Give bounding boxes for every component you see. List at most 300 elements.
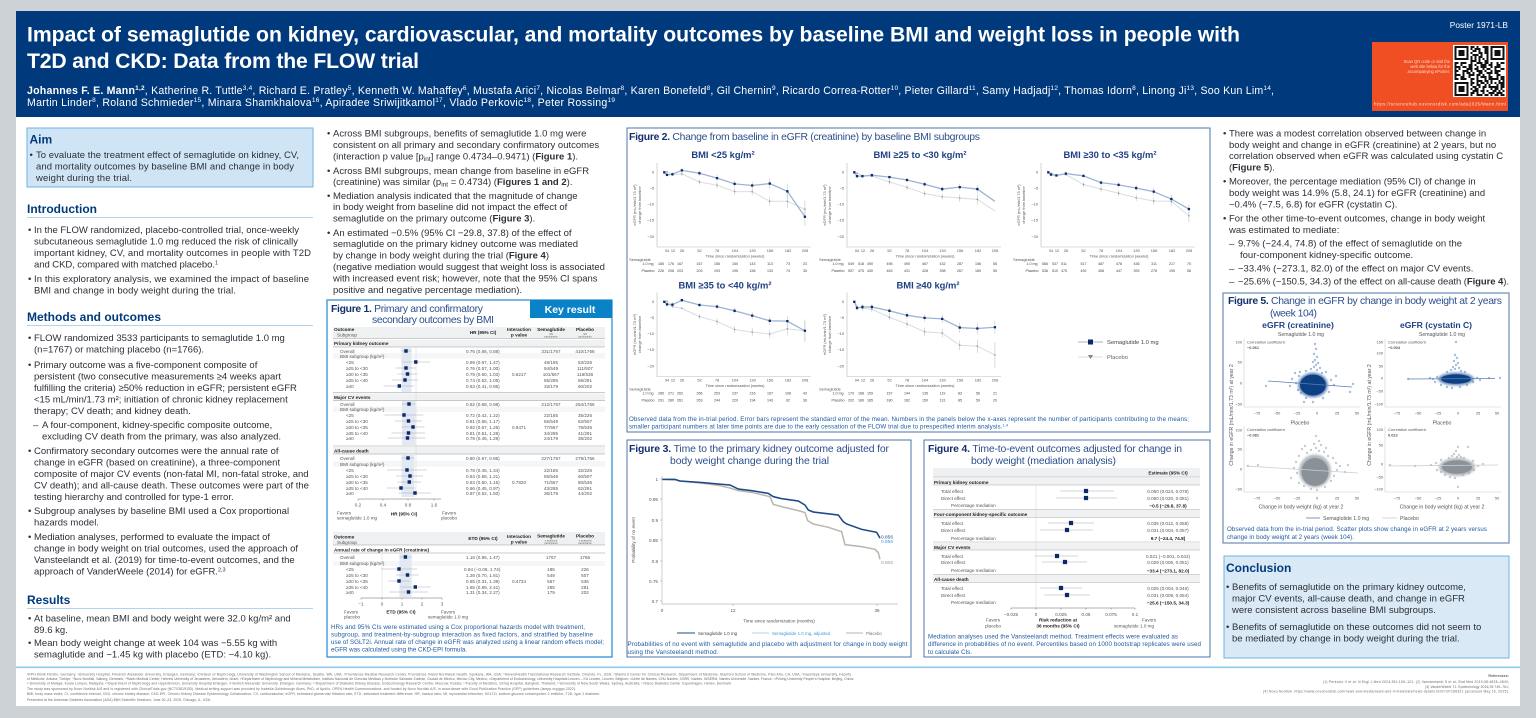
ETD table text: n analyzed bbox=[545, 540, 557, 542]
figure 1 footnote: HRs and 95% CIs were estimated using a Cox proportional hazards model with treatment, bbox=[331, 624, 585, 631]
mediation axis: Favors bbox=[986, 618, 1001, 622]
chart: BMI 25 to 30: 04 bbox=[855, 248, 860, 253]
figure 5 legend bbox=[1306, 516, 1419, 522]
chart: BMI 25 to 30: −5 bbox=[840, 186, 844, 190]
line chart: probability of no event: 1 bbox=[655, 477, 658, 482]
methods text: (n=1767) or matching placebo (n=1766). bbox=[34, 344, 204, 356]
authors: 19 bbox=[608, 97, 615, 104]
chart: BMI 35 to 40: 12 bbox=[671, 378, 675, 382]
chart: BMI under 25: 167 bbox=[677, 262, 683, 266]
chart: BMI 30 to 35: 78 bbox=[1099, 248, 1103, 253]
chart: BMI 25 to 30: 549 bbox=[848, 262, 854, 266]
chart: BMI 30 to 35: 511 bbox=[1061, 262, 1067, 266]
chart: BMI 40 or more: 135 bbox=[922, 392, 928, 396]
chart: BMI 40 or more: 189 bbox=[858, 398, 864, 402]
chart: BMI 35 to 40: 104 bbox=[732, 378, 739, 382]
chart: BMI 35 to 40: −15 bbox=[647, 347, 654, 352]
all-cause death rows: 80/536 bbox=[578, 480, 592, 485]
mediation table text: Four-component kidney-specific outcome bbox=[934, 512, 1028, 517]
chart: BMI 25 to 30: 104 bbox=[922, 248, 929, 253]
authors: 1,2 bbox=[135, 85, 145, 92]
chart: BMI 30 to 35: 458 bbox=[1098, 269, 1104, 273]
mediation table text: All-cause death bbox=[934, 577, 969, 582]
all-cause death rows: ≥35 to <40 bbox=[346, 486, 368, 491]
chart: BMI 30 to 35: 436 bbox=[1134, 262, 1140, 266]
chart: BMI 35 to 40: 261 bbox=[677, 398, 683, 402]
scatter axis titles: Change in body weight (kg) at year 2 bbox=[1259, 504, 1344, 510]
scatter plot: creatinine semaglutide: −0.061 bbox=[1247, 345, 1260, 350]
ETD table text: 1.16 (0.86, 1.47) bbox=[466, 555, 500, 560]
mediation table text: 0.050 (0.024, 0.078) bbox=[1147, 489, 1189, 494]
scatter plot: creatinine placebo: −50 bbox=[1235, 486, 1243, 492]
primary kidney outcome rows: 0.79 (0.60, 1.03) bbox=[466, 372, 500, 377]
chart: BMI 30 to 35: 487 bbox=[1098, 262, 1104, 266]
methods text: hazards model. bbox=[34, 518, 99, 528]
chart: BMI 40 or more: 04 bbox=[855, 378, 860, 382]
line chart: probability of no event: 12 bbox=[730, 608, 736, 613]
chart: BMI 35 to 40: 271 bbox=[668, 392, 674, 396]
methods text: • bbox=[28, 333, 31, 344]
figure 5 footnote: Observed data from the in-trial period. Scatter plots show change in eGFR at 2 years versus bbox=[1227, 526, 1487, 533]
primary kidney outcome rows: 68/291 bbox=[578, 378, 592, 383]
line chart: probability of no event: 0.7 bbox=[652, 599, 658, 604]
authors: , Soo Kun Lim bbox=[1194, 85, 1263, 97]
chart: BMI 30 to 35: 447 bbox=[1116, 269, 1122, 273]
methods text: – bbox=[33, 420, 39, 431]
column 3 findings text: – bbox=[1229, 276, 1235, 288]
references: References: bbox=[1488, 674, 1509, 678]
ETD table text: ≥30 to <35 bbox=[346, 579, 368, 584]
authors: , Apiradee Sriwijitkamol bbox=[320, 97, 435, 109]
scatter plot: cystatin placebo: 25 bbox=[1476, 496, 1480, 500]
chart: BMI 35 to 40: 266 bbox=[696, 392, 702, 396]
column 2 key findings text: Figure 1). bbox=[535, 152, 578, 162]
scatter plot: cystatin semaglutide: −100 bbox=[1374, 402, 1384, 406]
chart: BMI 25 to 30: −10 bbox=[837, 202, 845, 206]
chart: BMI 30 to 35: 517 bbox=[1080, 262, 1086, 266]
chart: BMI 40 or more: −20 bbox=[837, 364, 845, 368]
chart: BMI 25 to 30: Placebo bbox=[832, 269, 844, 273]
authors: , bbox=[1271, 85, 1274, 97]
column 3 findings text: For the other time-to-event outcomes, change in body weight bbox=[1229, 214, 1485, 224]
ETD table text: participants bbox=[544, 541, 558, 545]
all-cause death rows: 55/549 bbox=[544, 474, 558, 479]
mediation table text: −25.6 (−150.5, 34.3) bbox=[1147, 600, 1190, 606]
ETD table text: 179 bbox=[547, 590, 555, 595]
scatter plot: cystatin placebo: −50 bbox=[1415, 496, 1422, 500]
authors: , Karen Bonefeld bbox=[624, 85, 707, 97]
column 2 key findings text: • bbox=[327, 128, 330, 140]
all-cause death rows: BMI subgroup (kg/m²) bbox=[340, 462, 385, 467]
introduction text bbox=[28, 225, 311, 296]
chart: BMI 25 to 30: 26 bbox=[870, 248, 874, 253]
column 3 findings text: 9.7% (−24.4, 74.8) of the effect of semaglutide on the bbox=[1238, 238, 1462, 250]
methods text: change in eGFR (based on creatinine), a three-component bbox=[34, 458, 280, 468]
methods text: composite of major CV events (non-fatal MI, non-fatal stroke, and bbox=[34, 469, 309, 480]
ETD table text: BMI subgroup (kg/m²) bbox=[340, 561, 385, 566]
chart: BMI 25 to 30: 55 bbox=[993, 262, 997, 266]
scatter plot: creatinine placebo: Correlation coefficient: bbox=[1247, 427, 1286, 432]
scatter plot: cystatin semaglutide: 150 bbox=[1376, 340, 1384, 344]
forest plot: HR outcomes bbox=[333, 327, 605, 520]
chart: BMI 35 to 40: 244 bbox=[714, 398, 720, 402]
ETD table text: 0.4734 bbox=[512, 579, 526, 584]
introduction text: • bbox=[28, 274, 31, 285]
line chart: probability of no event: Probability of no event bbox=[631, 517, 636, 563]
primary kidney outcome rows: 0.76 (0.57, 1.00) bbox=[466, 366, 500, 371]
figure 1 footnote: eGFR was calculated using the CKD-EPI formula. bbox=[331, 646, 467, 654]
chart: BMI 35 to 40 bbox=[629, 280, 811, 402]
chart: BMI 35 to 40: 26 bbox=[680, 378, 684, 382]
scatter axis titles: Change in body weight (kg) at year 2 bbox=[1400, 504, 1485, 510]
footer affiliations and disclosures: ¹⁴University of Malaya, Kuala Lumpur, Malaysia; ¹⁵Department of Nephrology and Hypertension, University Hospital Erlangen, Friedrich Alexander University, Erlangen, Germany; ¹⁶Department of Diabetes Kidney Disease, Endocrinology Research Centre, Moscow, Russia; ¹⁷Faculty of Medicine, Siriraj Hospital, Bangkok, Thailand; ¹⁸University of New South Wales, Sydney, Australia; ¹⁹Steno Diabetes Center Copenhagen, Herlev, Denmark bbox=[27, 682, 731, 686]
conclusion text: were consistent across baseline BMI subgroups. bbox=[1231, 605, 1436, 616]
scatter plot: creatinine semaglutide bbox=[1235, 339, 1360, 416]
column 3 findings text: was estimated to mediate: bbox=[1228, 225, 1339, 236]
key result tab bbox=[530, 300, 612, 318]
chart: BMI 40 or more: 159 bbox=[867, 392, 873, 396]
ETD table text: ETD (95% CI) bbox=[468, 536, 498, 541]
major CV events rows: 0.79 (0.46, 1.29) bbox=[466, 436, 500, 441]
primary kidney outcome rows: BMI subgroup (kg/m²) bbox=[340, 354, 385, 359]
scatter plot: creatinine semaglutide: 25 bbox=[1335, 410, 1339, 416]
introduction text: In the FLOW randomized, placebo-controlled trial, once-weekly bbox=[34, 225, 299, 236]
chart: BMI 25 to 30: BMI ≥25 to <30 kg/m² bbox=[874, 149, 966, 160]
scatter plot: creatinine placebo: 100 bbox=[1236, 428, 1243, 432]
HR axis: 0.8 bbox=[405, 502, 412, 508]
column 2 key findings text: semaglutide on the primary kidney outcome was mediated bbox=[333, 239, 578, 250]
figure 5 title: (week 104) bbox=[1270, 308, 1317, 320]
all-cause death rows: 0.7820 bbox=[512, 480, 526, 485]
methods text: 2,3 bbox=[218, 568, 226, 574]
chart: BMI 30 to 35: eGFR (mL/min/1.73 m²) bbox=[1016, 184, 1021, 226]
introduction text: • bbox=[28, 225, 31, 236]
chart: BMI under 25: 150 bbox=[732, 262, 738, 266]
HR axis: 0.4 bbox=[380, 502, 387, 508]
scatter plot: cystatin placebo: −50 bbox=[1376, 474, 1384, 480]
authors: 15 bbox=[194, 97, 201, 104]
chart: BMI 40 or more: Semaglutide bbox=[819, 386, 841, 392]
methods text: Confirmatory secondary outcomes were the annual rate of bbox=[34, 446, 279, 457]
figure 1 title: secondary outcomes by BMI bbox=[372, 315, 494, 326]
chart: BMI under 25: −5 bbox=[650, 186, 654, 190]
section: introduction: Introduction bbox=[27, 202, 97, 216]
primary kidney outcome rows: ≥40 bbox=[346, 384, 354, 389]
aim text: and mortality outcomes by baseline BMI and change in body bbox=[36, 162, 294, 172]
mediation table text: 0.029 (0.006, 0.051) bbox=[1147, 560, 1189, 565]
chart: BMI 35 to 40: 78 bbox=[715, 378, 719, 382]
authors: 8 bbox=[621, 85, 625, 92]
chart: BMI 30 to 35 bbox=[1013, 149, 1195, 273]
mediation table text: Direct effect bbox=[941, 560, 966, 565]
figure 4 footnote: to calculate CIs. bbox=[928, 649, 972, 656]
authors: 16 bbox=[312, 97, 320, 104]
chart: BMI under 25: 26 bbox=[680, 248, 684, 253]
chart: BMI under 25: 78 bbox=[715, 248, 719, 253]
ETD table text: 0.84 (−0.06, 1.74) bbox=[464, 567, 501, 572]
primary kidney outcome rows: 60/202 bbox=[578, 384, 592, 389]
primary kidney outcome rows: 0.99 (0.67, 1.47) bbox=[466, 360, 500, 365]
chart: BMI 25 to 30: 130 bbox=[939, 248, 947, 253]
ETD table text: Outcome bbox=[334, 534, 355, 540]
chart: BMI 40 or more: 0 bbox=[842, 299, 845, 304]
chart: BMI 40 or more: −15 bbox=[837, 347, 844, 352]
primary kidney outcome rows: 101/567 bbox=[543, 372, 560, 377]
all-cause death rows: 0.80 (0.67, 0.95) bbox=[466, 456, 500, 461]
scatter plot: cystatin placebo: −100 bbox=[1374, 486, 1384, 492]
footer affiliations and disclosures: of Medicine, Ankara, Türkiye; ⁸Novo Nordisk, Søborg, Denmark; ⁹Rabin Medical Center, Hebrew University of Jerusalem, Jerusalem, Israel; ¹⁰Department of Nephrology and Mineral Metabolism, Instituto Nacional de Ciencias Médicas y Nutrición Salvador Zubirán, Ciudad de México, Mexico City, Mexico; ¹¹Department of Endocrinology, University Hospitals Leuven – KU Leuven, Leuven, Belgium; ¹²Unité de Nantes, CHU Nantes, CNRS, Nantes, INSERM, Nantes Université, Nantes, France; ¹³Peking University People's Hospital, Beijing, China; bbox=[27, 677, 854, 681]
scatter plot: creatinine semaglutide: Correlation coefficient: bbox=[1247, 340, 1286, 344]
figure 3 legend: Semaglutide 1.0 mg bbox=[698, 631, 738, 636]
table header: Outcome bbox=[334, 327, 355, 332]
chart: BMI 40 or more bbox=[819, 280, 1001, 402]
major CV events rows: 0.92 (0.67, 1.26) bbox=[466, 425, 500, 430]
all-cause death rows: 32/226 bbox=[578, 468, 592, 473]
chart: BMI under 25: 156 bbox=[750, 269, 756, 273]
chart: BMI 35 to 40: Time since randomization (weeks) bbox=[706, 383, 765, 388]
forest plot: mediation bbox=[933, 468, 1200, 628]
mediation table text: Percentage mediation bbox=[951, 600, 996, 605]
chart: BMI 25 to 30: 1.0 mg bbox=[832, 262, 844, 266]
chart: BMI 25 to 30: change from baseline bbox=[827, 186, 832, 224]
figure 3 legend bbox=[677, 631, 882, 636]
figure 1 title bbox=[331, 304, 494, 326]
section: methods and outcomes: Methods and outcomes bbox=[27, 310, 161, 324]
chart: BMI 35 to 40: 216 bbox=[750, 392, 756, 396]
references: (1) Perkovic V et al. N Engl J Med 2024;391:109–121; (2) Vansteelandt S et al. Stat Med 2019;38:4828–4840; bbox=[1323, 680, 1509, 684]
authors: Johannes F. E. Mann bbox=[27, 85, 145, 97]
major CV events rows: Overall bbox=[340, 402, 355, 407]
chart: BMI 40 or more: 20 bbox=[993, 398, 997, 402]
chart: BMI 25 to 30: Time since randomization (weeks) bbox=[896, 254, 955, 258]
chart: BMI 25 to 30: 432 bbox=[940, 262, 946, 266]
conclusion text: major CV events, all-cause death, and change in eGFR bbox=[1232, 594, 1465, 604]
figure 3 footnote bbox=[628, 641, 908, 656]
ETD table text: 567 bbox=[547, 579, 555, 584]
title: T2D and CKD: Data from the FLOW trial bbox=[27, 50, 419, 73]
chart: BMI 35 to 40: 156 bbox=[767, 378, 773, 382]
ETD axis bbox=[344, 598, 468, 620]
panel: figure 5 scatter plots: Semaglutide 1.0 mg bbox=[1419, 332, 1465, 338]
chart: BMI 30 to 35: 04 bbox=[1049, 248, 1054, 253]
figure 4 title: body weight (mediation analysis) bbox=[971, 456, 1116, 467]
column 2 key findings text: • bbox=[327, 166, 330, 177]
chart: BMI 30 to 35: 0 bbox=[1036, 170, 1039, 174]
column 3 findings text: There was a modest correlation observed between change in bbox=[1229, 128, 1486, 140]
chart: BMI under 25: 182 bbox=[785, 248, 791, 253]
methods text: excluding CV death from the primary, was also analyzed. bbox=[42, 432, 281, 442]
scatter plot: creatinine semaglutide: −25 bbox=[1294, 410, 1300, 416]
scatter plot: cystatin semaglutide: −50 bbox=[1415, 410, 1422, 416]
figure 2 footnote: Observed data from the in-trial period. Error bars represent the standard error of the mean. Numbers in the panels below the x-axes represent the number of participants contributing to the means; bbox=[629, 416, 1189, 423]
major CV events rows: ≥35 to <40 bbox=[346, 431, 368, 436]
conclusion text: • bbox=[1226, 582, 1229, 593]
chart: BMI 35 to 40: −5 bbox=[650, 315, 654, 320]
all-cause death rows: 62/291 bbox=[578, 486, 592, 491]
methods text: Mediation analyses, performed to evaluate the impact of bbox=[34, 532, 270, 543]
scatter plot: cystatin semaglutide: Correlation coefficient: bbox=[1388, 340, 1427, 344]
QR callout: web site below for the bbox=[1410, 64, 1451, 69]
line chart: probability of no event: 0.95 bbox=[649, 497, 658, 502]
chart: BMI 30 to 35: 12 bbox=[1055, 248, 1059, 253]
ETD table text: 1767 bbox=[546, 555, 557, 560]
chart: BMI 25 to 30: 507 bbox=[848, 269, 854, 273]
ETD axis: 2 bbox=[421, 602, 424, 606]
chart: BMI 30 to 35: 492 bbox=[1080, 269, 1086, 273]
methods text: fulfilling the criteria) ≥50% reduction in eGFR; persistent eGFR bbox=[34, 383, 297, 394]
column 2 key findings text: by change in body weight during the trial (Figure 4) bbox=[333, 250, 549, 262]
chart: BMI under 25: 176 bbox=[668, 262, 674, 266]
ETD table text: Annual rate of change in eGFR (creatinine) bbox=[334, 548, 430, 552]
scatter plot: cystatin placebo: 50 bbox=[1495, 496, 1500, 500]
scatter plot: cystatin semaglutide: 0 bbox=[1457, 410, 1460, 416]
all-cause death rows: 44/202 bbox=[578, 491, 592, 496]
scatter plot: creatinine semaglutide: 100 bbox=[1236, 340, 1243, 344]
panel: figure 3 time to primary outcome bbox=[627, 440, 911, 657]
panel: figure 2 eGFR by BMI bbox=[627, 128, 1210, 432]
authors: 12 bbox=[1051, 85, 1058, 92]
ETD table text: p value bbox=[511, 540, 527, 544]
HR axis: Favors bbox=[337, 510, 352, 516]
chart: BMI under 25: 30 bbox=[803, 269, 807, 273]
authors: 9 bbox=[772, 85, 776, 92]
major CV events rows: 77/567 bbox=[544, 425, 558, 430]
panel: figure 4 mediation analysis bbox=[924, 440, 1210, 657]
major CV events rows: BMI subgroup (kg/m²) bbox=[340, 407, 385, 412]
mediation table text: 0.021 (−0.001, 0.042) bbox=[1146, 554, 1190, 559]
HR axis: 0.2 bbox=[355, 502, 362, 508]
column 2 key findings text: semaglutide on the primary outcome (Figure 3). bbox=[333, 214, 535, 224]
figure 2 legend: Placebo bbox=[1107, 355, 1128, 361]
all-cause death rows: 227/1767 bbox=[541, 456, 561, 461]
figure 3 title bbox=[629, 444, 890, 467]
column 3 findings text: – bbox=[1229, 264, 1235, 274]
primary kidney outcome rows: 111/507 bbox=[577, 366, 593, 371]
chart: BMI 35 to 40: 280 bbox=[668, 398, 674, 402]
chart: BMI 25 to 30: 156 bbox=[957, 248, 963, 253]
authors: , Pieter Gillard bbox=[898, 85, 969, 97]
HR axis: semaglutide 1.0 mg bbox=[337, 516, 378, 520]
chart: BMI 40 or more: 119 bbox=[940, 392, 945, 396]
title bbox=[27, 24, 1240, 73]
chart: BMI 35 to 40: 229 bbox=[732, 398, 738, 402]
scatter axis titles bbox=[1229, 364, 1485, 510]
mediation axis: semaglutide 1.0 mg bbox=[1114, 624, 1154, 628]
chart: BMI 40 or more: 78 bbox=[905, 378, 909, 382]
chart: BMI 35 to 40: 0 bbox=[652, 299, 655, 304]
chart: BMI 30 to 35: 182 bbox=[1169, 248, 1175, 253]
scatter axis titles: Change in eGFR (mL/min/1.73 m²) at year 2 bbox=[1229, 364, 1235, 466]
chart: BMI 40 or more: 85 bbox=[958, 398, 962, 402]
mediation axis: placebo bbox=[985, 624, 1001, 628]
chart: BMI 40 or more: 56 bbox=[976, 392, 980, 396]
chart: BMI under 25: 52 bbox=[697, 248, 702, 253]
chart: BMI 40 or more: 83 bbox=[958, 392, 962, 396]
ETD axis: 1 bbox=[401, 602, 404, 606]
chart: BMI 35 to 40: change from baseline bbox=[637, 316, 642, 353]
ETD table text: n analyzed bbox=[579, 540, 591, 542]
scatter plot: cystatin semaglutide: 50 bbox=[1495, 410, 1500, 416]
aim text bbox=[30, 150, 299, 184]
mediation table text: 0.031 (0.004, 0.057) bbox=[1147, 528, 1189, 533]
ETD table text: participants bbox=[578, 541, 592, 545]
scatter plot: cystatin semaglutide: 100 bbox=[1376, 350, 1384, 356]
scatter plot: creatinine semaglutide: −50 bbox=[1235, 402, 1243, 406]
column 2 key findings text bbox=[327, 128, 605, 296]
poster number: Poster 1971-LB bbox=[1450, 20, 1508, 30]
mediation table text: Direct effect bbox=[941, 496, 966, 501]
ETD table text: 1.31 (0.34, 2.27) bbox=[466, 590, 500, 595]
ETD table text: 507 bbox=[581, 573, 589, 578]
chart: BMI 35 to 40: 52 bbox=[697, 378, 702, 382]
chart: BMI 40 or more: 21 bbox=[993, 392, 997, 396]
methods text: approach of VanderWeele (2014) for eGFR. bbox=[34, 566, 218, 578]
panel: aim bbox=[27, 128, 313, 187]
chart: BMI under 25: BMI <25 kg/m² bbox=[691, 149, 755, 160]
all-cause death rows: 0.97 (0.62, 1.50) bbox=[466, 491, 500, 496]
ETD table text: 185 bbox=[547, 567, 555, 572]
authors: , Richard E. Pratley bbox=[252, 85, 348, 97]
mediation table text: −33.4 (−273.1, 82.0) bbox=[1147, 568, 1190, 574]
aim text: weight during the trial. bbox=[35, 173, 132, 184]
major CV events rows: 0.82 (0.68, 0.98) bbox=[466, 402, 500, 407]
figure 2 legend: Semaglutide 1.0 mg bbox=[1107, 340, 1159, 346]
figure 1 title: Figure 1. Primary and confirmatory bbox=[331, 304, 484, 315]
primary kidney outcome rows: 53/226 bbox=[578, 360, 592, 365]
chart: BMI 35 to 40: 253 bbox=[714, 392, 720, 396]
mediation table text: Total effect bbox=[941, 586, 964, 591]
QR callout: https://sciencehub.novonordisk.com/ada2025/Mann.html bbox=[1374, 102, 1506, 106]
authors: , Kenneth W. Mahaffey bbox=[352, 85, 463, 97]
introduction text: important kidney, CV, and mortality outcomes in people with T2D bbox=[34, 248, 311, 259]
ETD table text: 1.65 (0.89, 2.41) bbox=[466, 585, 500, 590]
mediation axis: Favors bbox=[1142, 618, 1157, 622]
all-cause death rows: 22/185 bbox=[544, 468, 558, 473]
mediation table text: Percentage mediation bbox=[951, 503, 996, 508]
scatter plot: creatinine semaglutide: −50 bbox=[1274, 410, 1281, 416]
scatter plot: creatinine placebo bbox=[1235, 426, 1360, 500]
chart: BMI 25 to 30: 267 bbox=[957, 269, 963, 273]
section: introduction bbox=[27, 202, 313, 296]
chart: BMI under 25: 113 bbox=[767, 262, 773, 266]
chart: BMI 40 or more: BMI ≥40 kg/m² bbox=[897, 280, 959, 290]
ETD axis: 3 bbox=[441, 602, 444, 606]
primary kidney outcome rows: Overall bbox=[340, 349, 355, 354]
column 2 key findings text: positive and negative percentage mediation). bbox=[333, 285, 522, 296]
column 2 key findings text: in body weight from baseline did not impact the effect of bbox=[333, 202, 568, 213]
chart: BMI 30 to 35: 52 bbox=[1081, 248, 1086, 253]
line chart: probability of no event: 0.806 bbox=[881, 560, 893, 566]
scatter plot: cystatin semaglutide bbox=[1374, 339, 1501, 416]
chart: BMI 30 to 35: 510 bbox=[1052, 269, 1058, 273]
figure 5 title: Figure 5. Change in eGFR by change in body weight at 2 years bbox=[1228, 296, 1502, 307]
mediation table text: −0.5 (−29.8, 37.8) bbox=[1149, 504, 1187, 508]
figure 1 footnote: use of SGLT2i. Annual rate of change in eGFR was analyzed using a linear random effects model; bbox=[331, 639, 604, 646]
column 3 findings text: −33.4% (−273.1, 82.0) of the effect on major CV events. bbox=[1238, 264, 1473, 274]
scatter plot: cystatin placebo: 0 bbox=[1457, 496, 1460, 500]
chart: BMI 30 to 35: 537 bbox=[1052, 262, 1058, 266]
mediation table text: 9.7 (−24.4, 74.8) bbox=[1151, 536, 1186, 541]
chart: BMI 35 to 40: 92 bbox=[786, 398, 790, 402]
chart: BMI 40 or more: change from baseline bbox=[827, 316, 832, 353]
chart: BMI 30 to 35: 536 bbox=[1042, 269, 1048, 273]
chart: BMI 35 to 40: Semaglutide bbox=[629, 386, 651, 392]
column 2 key findings text: • bbox=[327, 191, 330, 202]
mediation axis: 36 months (95% CI) bbox=[1036, 624, 1080, 628]
chart: BMI 25 to 30: 498 bbox=[886, 262, 892, 266]
methods text: CV death); and all-cause death. These outcomes were part of the bbox=[34, 480, 309, 492]
methods text: A four-component, kidney-specific composite outcome, bbox=[42, 420, 272, 431]
